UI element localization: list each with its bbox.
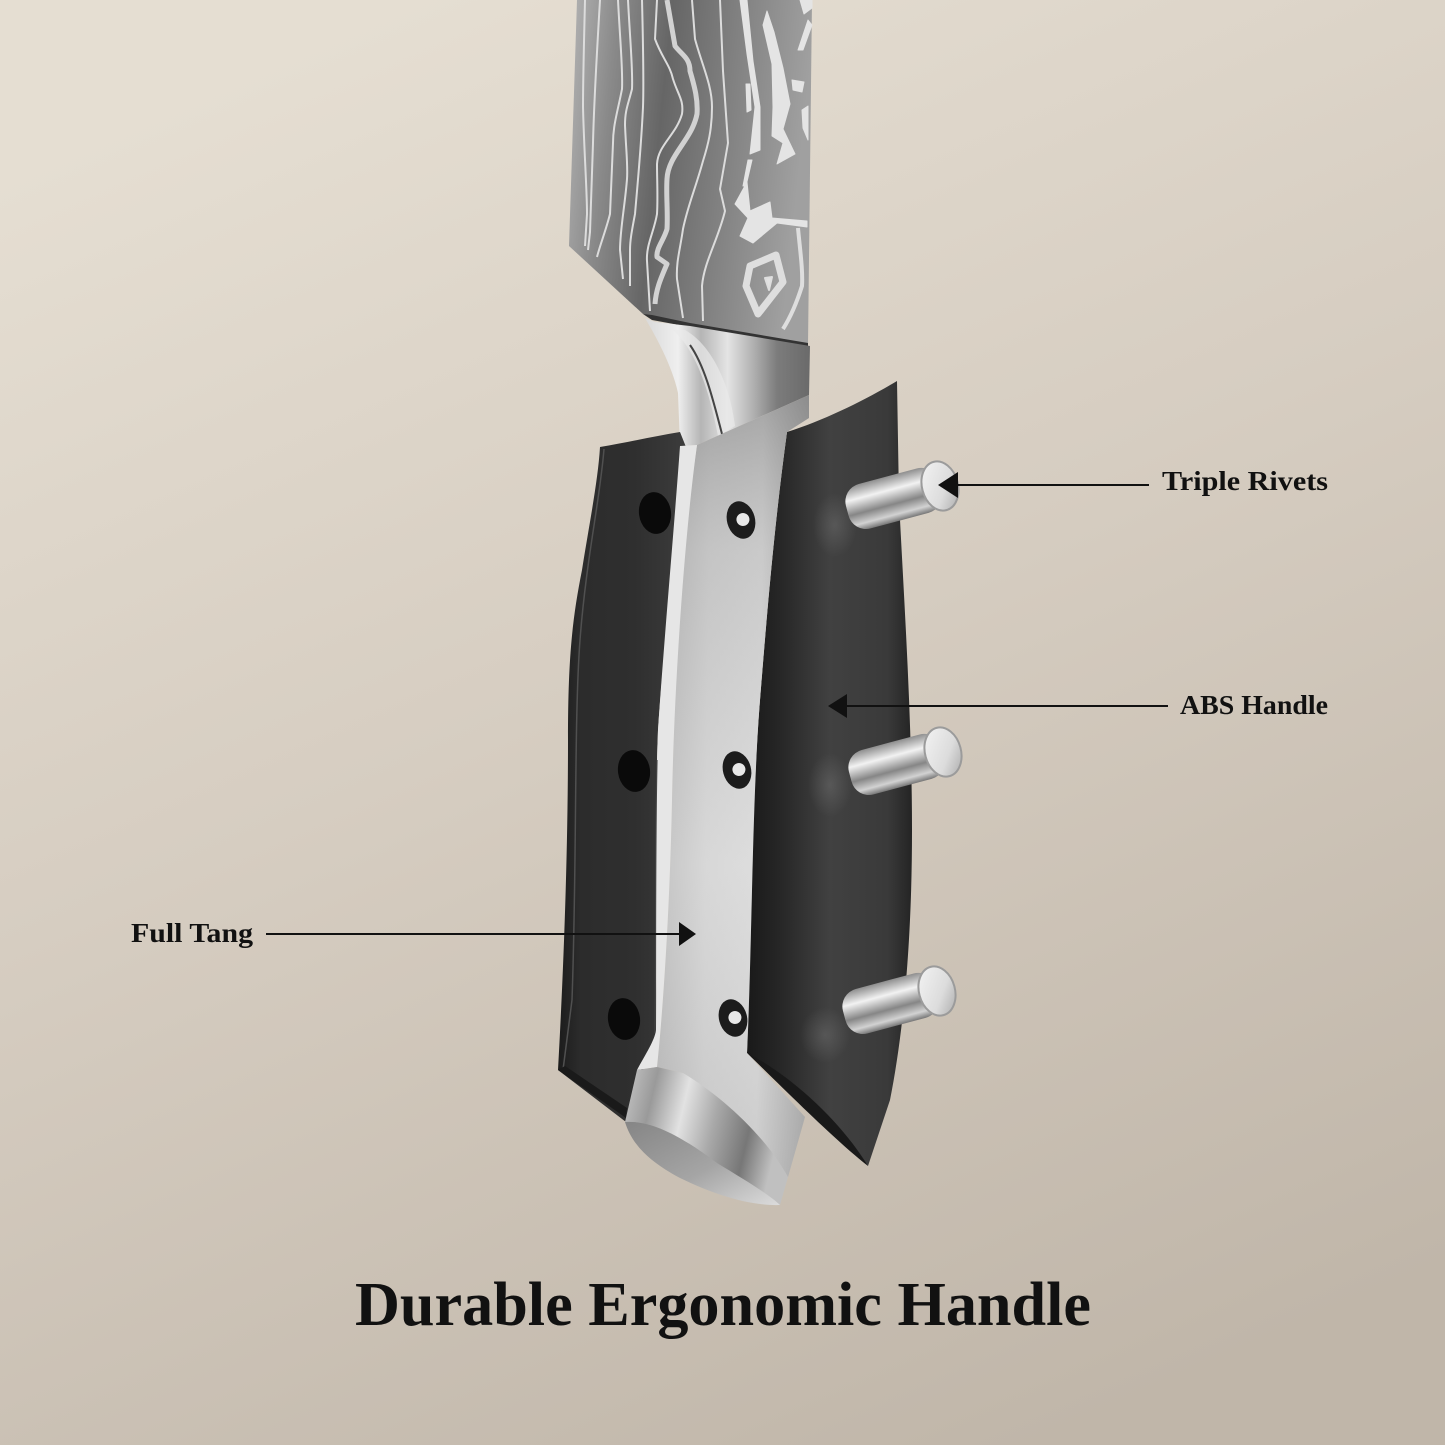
label: ABS handle: ABS Handle — [1180, 690, 1328, 720]
pommel — [625, 1067, 788, 1205]
bottom rivet — [838, 962, 961, 1040]
arrow: triple rivets — [938, 472, 1149, 498]
label: triple rivets: Triple Rivets — [1162, 466, 1328, 496]
arrow: ABS handle — [828, 694, 1168, 718]
label: full tang: Full Tang — [131, 918, 254, 948]
blade with damascus pattern — [569, 0, 812, 347]
arrow: full tang — [266, 922, 696, 946]
bolster — [645, 318, 810, 446]
right handle scale — [747, 381, 912, 1166]
knife illustration — [558, 0, 967, 1205]
full tang — [637, 395, 809, 1177]
tang rivet holes — [715, 498, 759, 1040]
left handle scale — [558, 432, 686, 1122]
title: Durable Ergonomic Handle — [355, 1271, 1091, 1339]
top rivet — [841, 457, 964, 535]
middle rivet — [844, 723, 967, 801]
left scale holes — [605, 490, 674, 1042]
